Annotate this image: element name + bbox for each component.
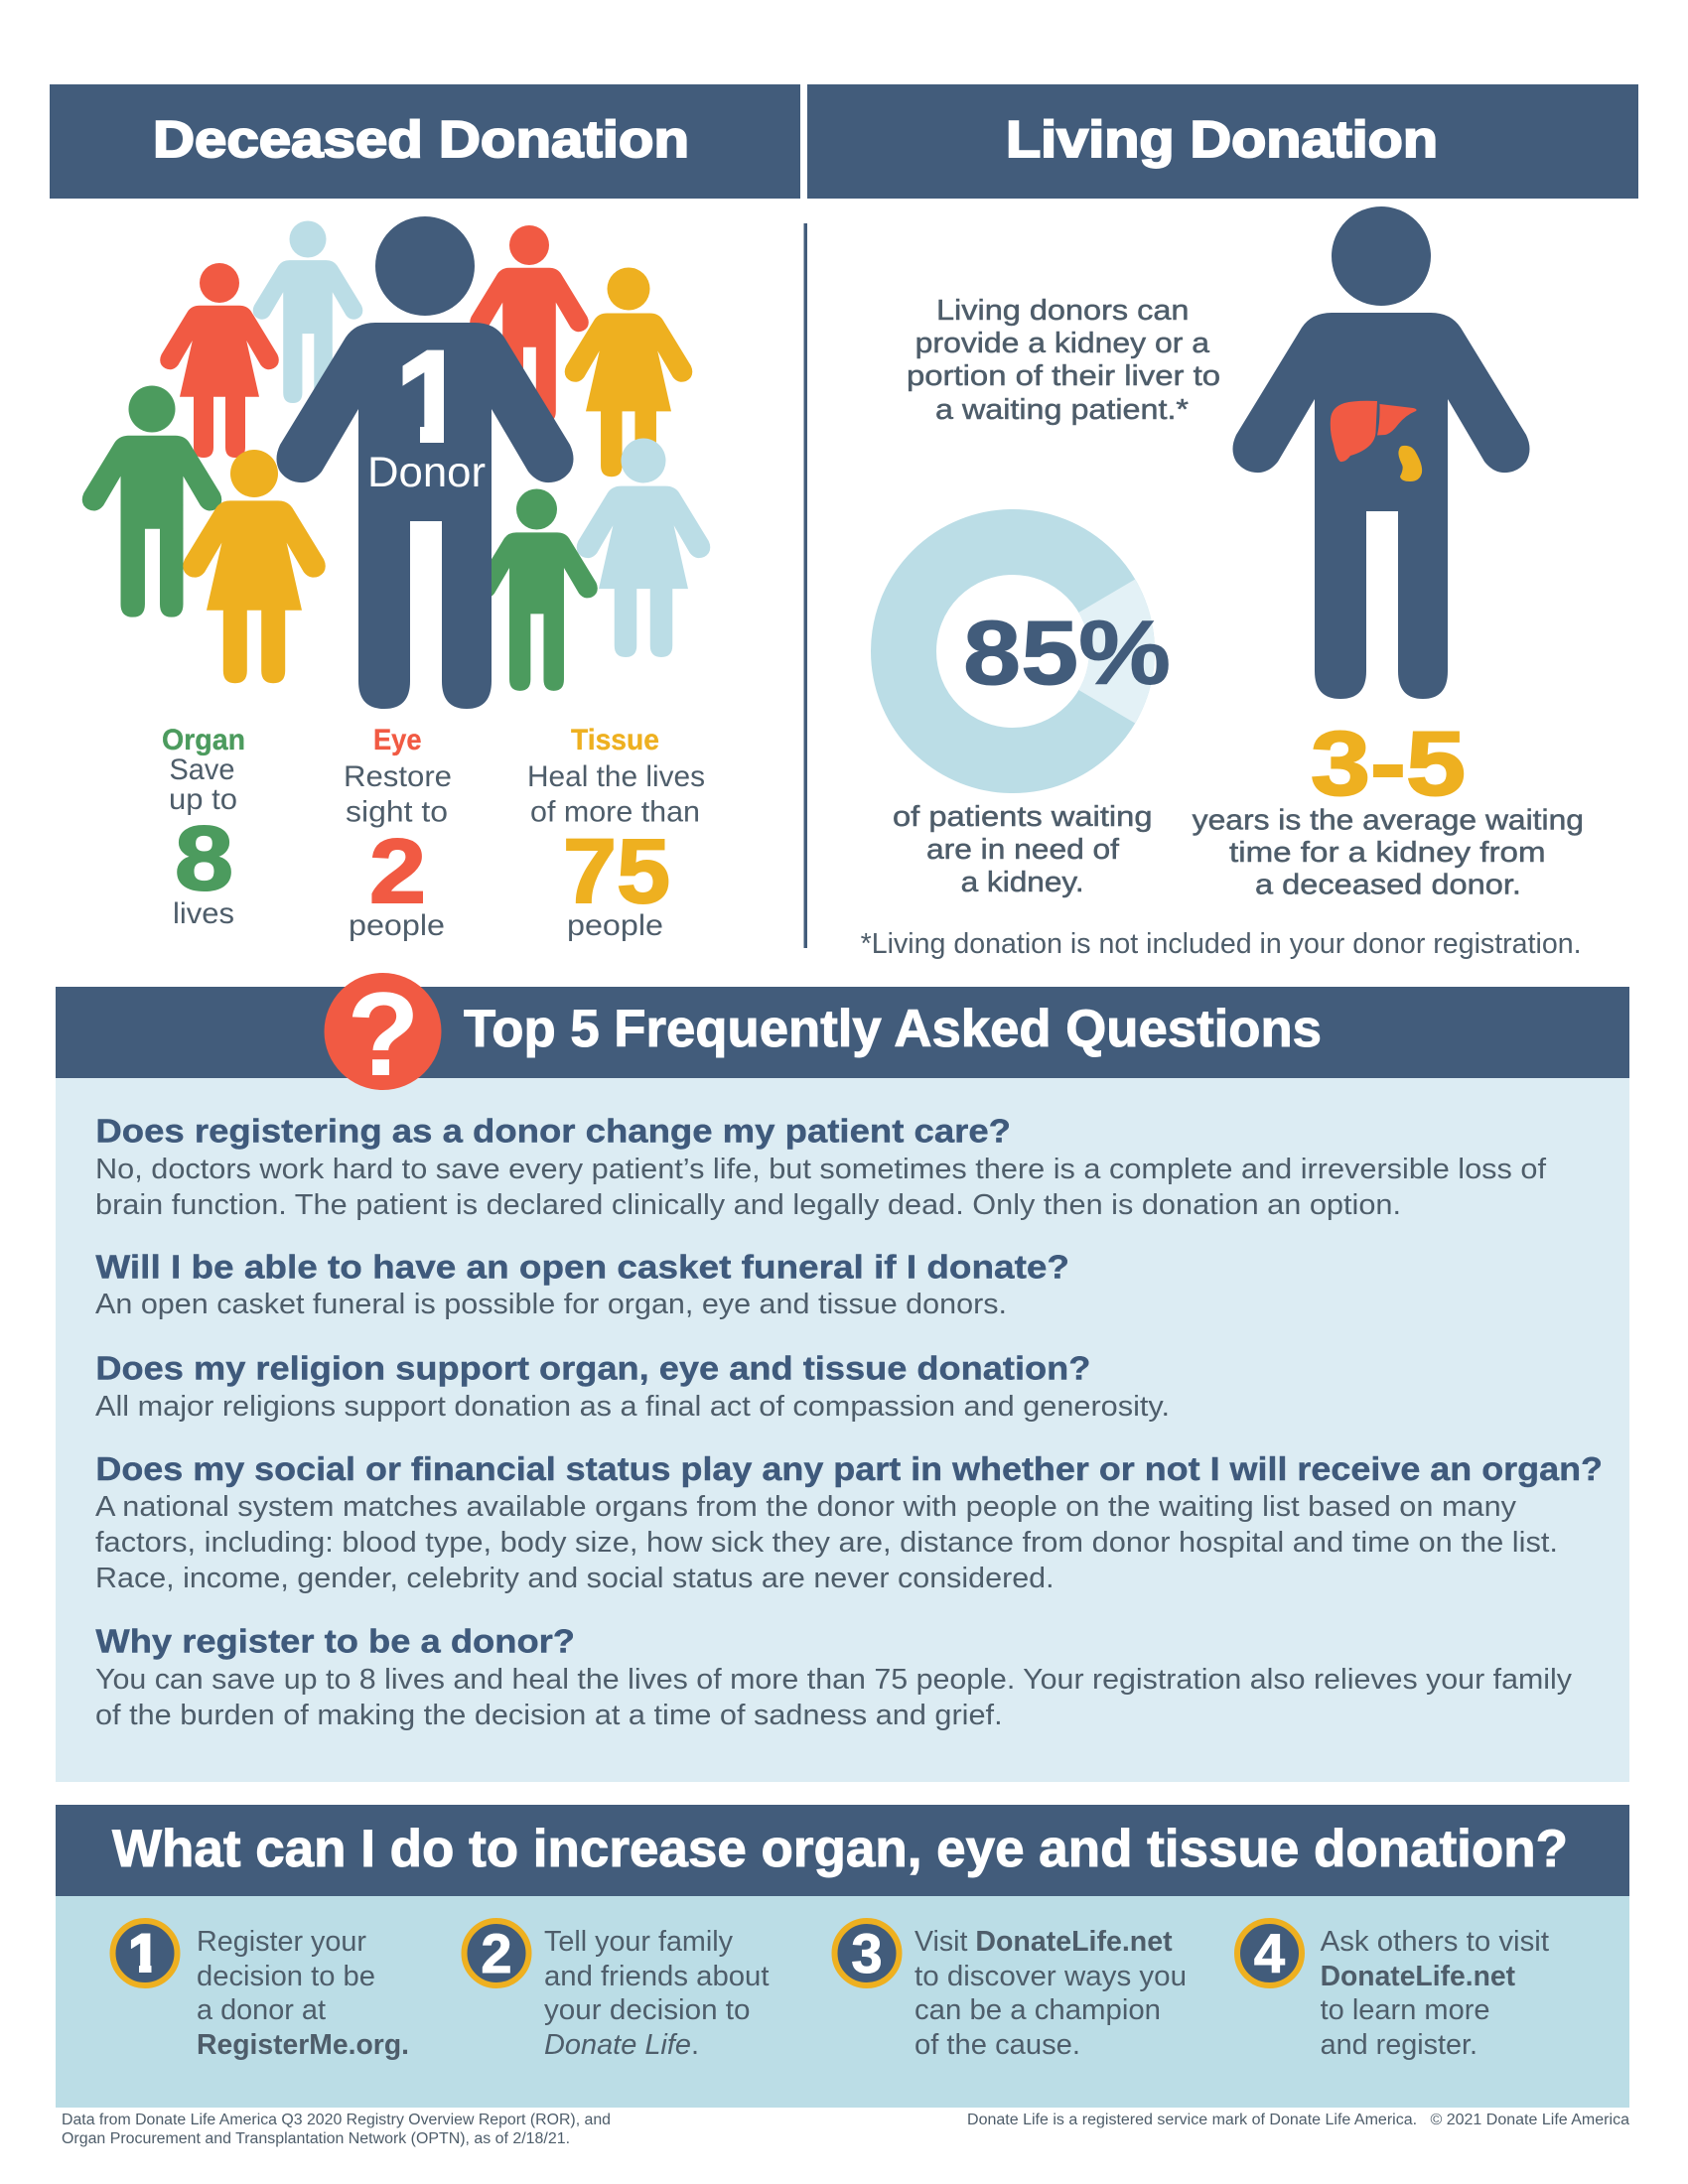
icon: kidney: [1398, 446, 1422, 481]
step 3: can be a champion: [914, 1994, 1161, 2026]
stat: eye: Restore: [344, 760, 452, 793]
step 3: Visit DonateLife.net: [914, 1926, 1173, 1958]
stat: organ: lives: [173, 897, 234, 930]
step 4: to learn more: [1321, 1994, 1489, 2026]
heading band: faq: [56, 968, 1629, 1101]
panel: frequently asked questions: [56, 968, 1629, 1782]
text: living donors can provide: provide a kidney or a: [915, 328, 1210, 359]
stat: tissue: Heal the lives: [527, 760, 705, 793]
icon: number 3: [834, 1921, 900, 1985]
footer: data sources: [62, 2112, 611, 2147]
icon: number 2: [465, 1921, 528, 1985]
donor label: Donor: [367, 449, 486, 496]
step 3: to discover ways you: [914, 1961, 1187, 1992]
caption: patients in need of a kidney: a kidney.: [961, 867, 1084, 898]
text: living donors can provide: Living donors can: [936, 295, 1190, 327]
stat: 3-5 years waiting time: years is the average waiting: [1193, 804, 1584, 836]
donor number: 1: [396, 325, 469, 471]
stat: eye: [344, 724, 452, 942]
faq item 5: Why register to be a donor?: [95, 1622, 575, 1660]
chart: donut 85 percent: [904, 542, 1171, 760]
step 4: Ask others to visit: [1321, 1926, 1549, 1958]
icon: living donor figure with liver and kidney: [1233, 206, 1529, 699]
stat: organ: Organ: [162, 724, 245, 756]
stat: 3-5 years waiting time: 3-5: [1311, 713, 1466, 814]
faq item 4: [95, 1450, 1603, 1594]
heading band: deceased donation: [50, 84, 800, 199]
donut value: 85%: [963, 603, 1171, 704]
caption: patients in need of a kidney: are in need of: [926, 834, 1120, 866]
icon: question mark: [324, 968, 441, 1101]
faq item 1: No, doctors work hard to save every patient’s life, but sometimes there is a complete and irreversible loss of: [95, 1154, 1547, 1185]
heading band: living donation: [807, 84, 1638, 199]
text: living donors can provide: a waiting patient.*: [935, 394, 1189, 426]
faq item 3: All major religions support donation as a final act of compassion and generosity.: [95, 1391, 1170, 1423]
step 3: [834, 1921, 1187, 2061]
step 2: Tell your family: [544, 1926, 733, 1958]
stat: 3-5 years waiting time: [1193, 713, 1584, 901]
step 2: your decision to: [544, 1994, 751, 2026]
footer: data sources: Organ Procurement and Transplantation Network (OPTN), as of 2/18/21.: [62, 2130, 570, 2147]
stat: tissue: [527, 724, 705, 942]
stat: tissue: of more than: [530, 796, 700, 828]
faq item 3: [95, 1350, 1170, 1423]
faq item 4: Does my social or financial status play any part in whether or not I will receive an organ?: [95, 1450, 1603, 1487]
footer: data sources: Data from Donate Life America Q3 2020 Registry Overview Report (ROR), and: [62, 2112, 611, 2128]
faq item 5: of the burden of making the decision at a time of sadness and grief.: [95, 1700, 1003, 1731]
step 3: of the cause.: [914, 2029, 1080, 2061]
step 2: and friends about: [544, 1961, 769, 1992]
faq item 5: [95, 1622, 1573, 1731]
heading band: what can I do: [56, 1805, 1629, 1896]
icon: number 3: 3: [851, 1922, 883, 1984]
stat: organ: 8: [175, 808, 233, 909]
faq item 4: A national system matches available organs from the donor with people on the waiting list based on many: [95, 1491, 1517, 1523]
panel: what can I do: [56, 1805, 1629, 2108]
text: living donors can provide: portion of their liver to: [907, 360, 1220, 392]
stat: organ: up to: [169, 783, 237, 816]
icon: number 1: 1: [128, 1922, 160, 1984]
faq item 2: An open casket funeral is possible for organ, eye and tissue donors.: [95, 1289, 1007, 1320]
step 1: decision to be: [197, 1961, 375, 1992]
text: living donors can provide: [907, 295, 1220, 426]
caption: patients in need of a kidney: [893, 801, 1152, 898]
step 1: Register your: [197, 1926, 366, 1958]
panel: deceased donation: [50, 84, 800, 942]
faq item 1: brain function. The patient is declared clinically and legally dead. Only then is donation an option.: [95, 1189, 1401, 1221]
step 2: Donate Life.: [544, 2029, 699, 2061]
panel: living donation: [807, 84, 1638, 960]
faq item 4: Race, income, gender, celebrity and social status are never considered.: [95, 1563, 1055, 1594]
faq item 5: You can save up to 8 lives and heal the lives of more than 75 people. Your registration also relieves your family: [95, 1664, 1573, 1696]
step 1: RegisterMe.org.: [197, 2029, 409, 2061]
stat: tissue: 75: [563, 821, 670, 922]
stat: tissue: people: [567, 909, 663, 942]
stat: tissue: Tissue: [571, 724, 659, 756]
faq item 1: [95, 1112, 1547, 1221]
stat: eye: people: [349, 909, 445, 942]
step 4: and register.: [1321, 2029, 1477, 2061]
icon: liver: [1331, 401, 1417, 462]
caption: patients in need of a kidney: of patients waiting: [893, 801, 1152, 833]
footer: service mark and copyright: Donate Life is a registered service mark of Donate Life America. © 2021 Donate Life America: [967, 2112, 1629, 2128]
stat: eye: Eye: [373, 724, 421, 756]
heading band: deceased donation: Deceased Donation: [153, 111, 689, 169]
step 4: DonateLife.net: [1321, 1961, 1515, 1992]
stat: 3-5 years waiting time: time for a kidney from: [1229, 837, 1546, 869]
icon: question mark: ?: [347, 968, 420, 1101]
stat: organ: [162, 724, 245, 930]
heading band: living donation: Living Donation: [1006, 111, 1438, 169]
faq item 1: Does registering as a donor change my patient care?: [95, 1112, 1011, 1150]
heading band: faq: Top 5 Frequently Asked Questions: [464, 1000, 1322, 1058]
heading band: what can I do: What can I do to increase organ, eye and tissue donation?: [112, 1820, 1568, 1878]
icon: number 4: [1237, 1921, 1302, 1985]
faq item 3: Does my religion support organ, eye and tissue donation?: [95, 1350, 1090, 1386]
stat: organ: Save: [169, 753, 234, 786]
stat: 3-5 years waiting time: a deceased donor.: [1255, 870, 1521, 901]
footnote: living donation: *Living donation is not included in your donor registration.: [861, 928, 1582, 960]
icon: number 4: 4: [1254, 1922, 1285, 1984]
faq item 2: [95, 1249, 1069, 1320]
faq item 2: Will I be able to have an open casket funeral if I donate?: [95, 1249, 1069, 1285]
step 1: a donor at: [197, 1994, 326, 2026]
icon: number 2: 2: [481, 1922, 512, 1984]
faq item 4: factors, including: blood type, body size, how sick they are, distance from donor hospital and time on the list.: [95, 1527, 1558, 1559]
people illustration: one donor and eight recipients: [82, 216, 710, 709]
icon: number 1: [113, 1921, 177, 1985]
stat: eye: sight to: [346, 796, 448, 828]
step 2: [465, 1921, 769, 2061]
step 1: [113, 1921, 409, 2061]
step 4: [1237, 1921, 1549, 2061]
stat: eye: 2: [369, 821, 426, 922]
